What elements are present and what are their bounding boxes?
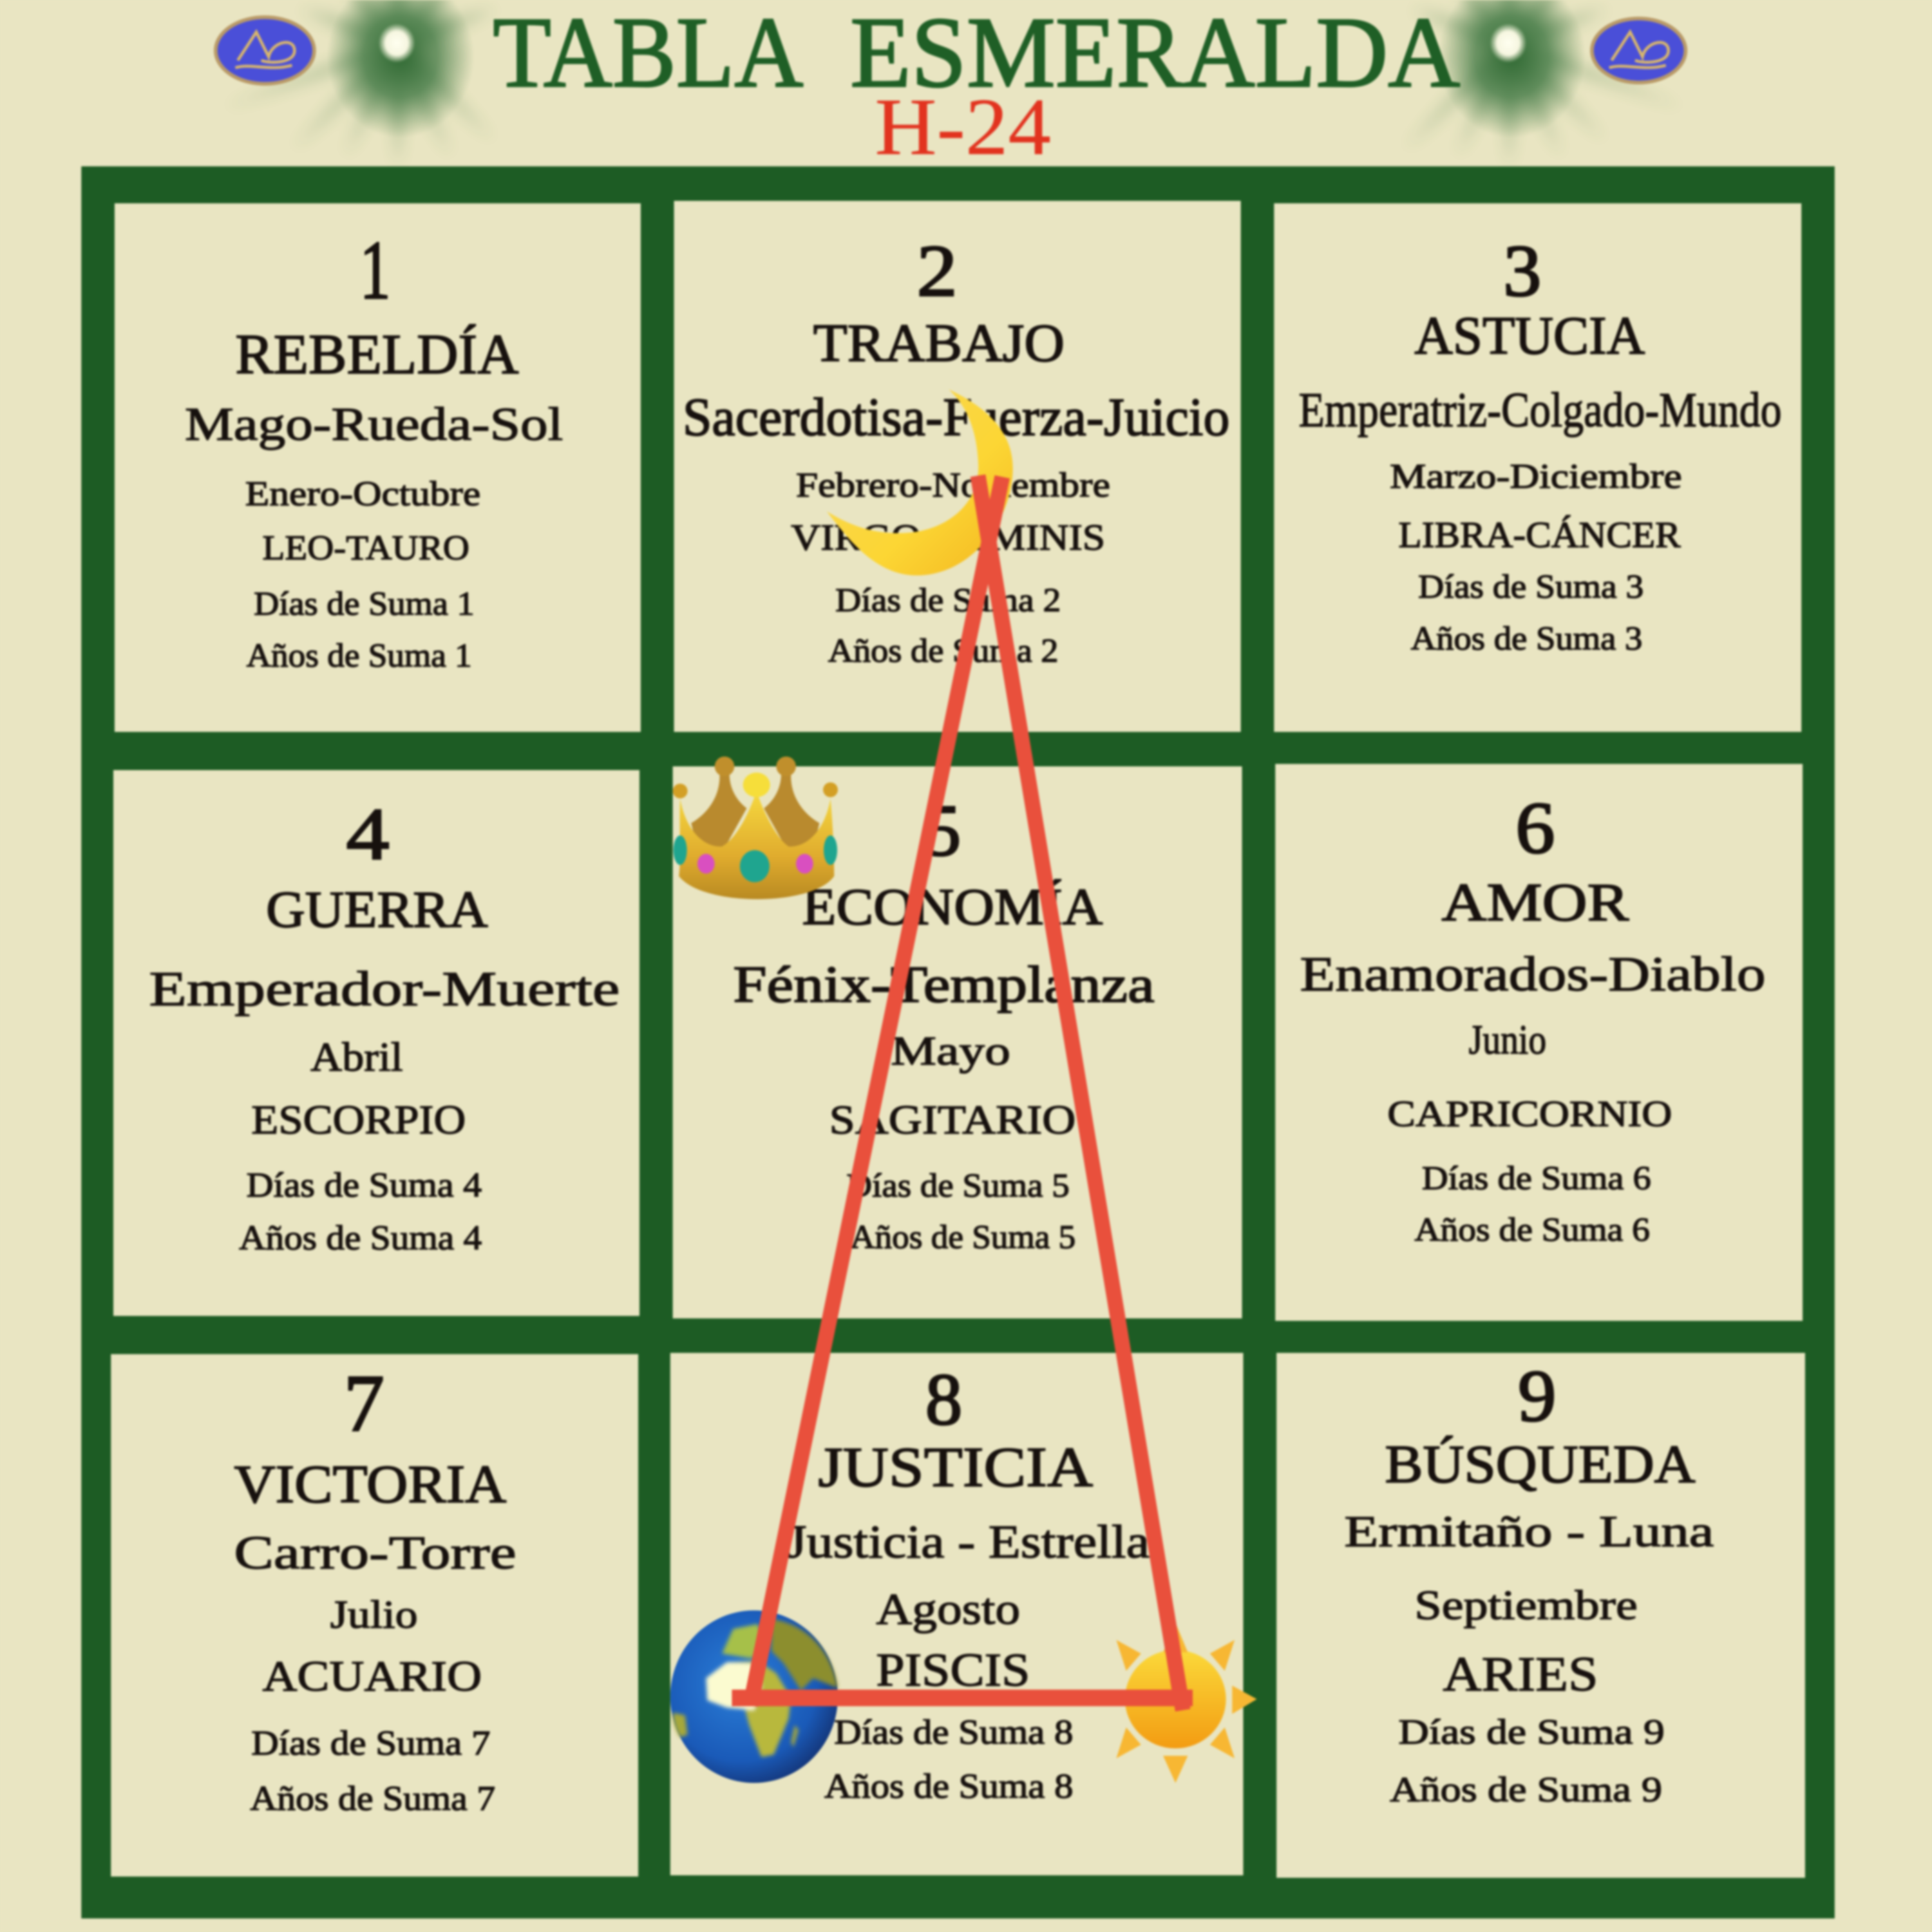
details: VIRGO-GÉMINIS (791, 517, 1105, 558)
details: ESCORPIO (251, 1097, 466, 1142)
number 2: 2 (916, 230, 958, 312)
cell background (111, 1354, 638, 1877)
number 3: 3 (1503, 230, 1541, 312)
icon: crown (673, 757, 838, 899)
heading: GUERRA (266, 881, 488, 938)
cell background (113, 770, 639, 1316)
panel: cell 9 Búsqueda (1276, 1353, 1805, 1878)
details: Años de Suma 5 (850, 1219, 1075, 1256)
details: Enero-Octubre (245, 474, 480, 513)
details: Ermitaño - Luna (1344, 1507, 1714, 1556)
icon: left logo badge (216, 17, 314, 84)
number 9: 9 (1518, 1355, 1556, 1437)
details: Años de Suma 9 (1390, 1770, 1662, 1810)
heading: ECONOMÍA (802, 878, 1103, 936)
details (185, 398, 563, 674)
details (1299, 383, 1782, 657)
number 7: 7 (344, 1358, 384, 1448)
icon: crescent moon (827, 390, 1013, 575)
details: Días de Suma 6 (1422, 1160, 1651, 1197)
details: Días de Suma 8 (834, 1712, 1073, 1751)
panel: cell 5 Economía (673, 766, 1242, 1318)
details: Días de Suma 1 (254, 586, 475, 623)
heading: TRABAJO (813, 314, 1065, 374)
heading: BÚSQUEDA (1385, 1435, 1696, 1495)
heading: REBELDÍA (235, 324, 518, 386)
details: ARIES (1443, 1647, 1598, 1701)
details (786, 1515, 1150, 1805)
details: Julio (330, 1593, 418, 1636)
panel: cell 7 Victoria (111, 1354, 638, 1877)
details (733, 956, 1155, 1256)
cell background (1275, 764, 1803, 1321)
cell background (115, 204, 641, 732)
panel: cell 4 Guerra (113, 770, 639, 1316)
details: Mayo (891, 1028, 1010, 1074)
details: Días de Suma 5 (846, 1168, 1070, 1204)
cell background (1274, 204, 1801, 732)
panel: cell 1 Rebeldía (115, 204, 641, 732)
details: PISCIS (876, 1643, 1030, 1696)
triangle: red lines connecting moon, globe and sun (732, 476, 1193, 1710)
details: Enamorados-Diablo (1300, 947, 1766, 1001)
details: Agosto (876, 1585, 1020, 1634)
details: Junio (1469, 1017, 1546, 1063)
heading: ASTUCIA (1414, 306, 1645, 366)
details (683, 387, 1229, 669)
details: Años de Suma 8 (824, 1766, 1073, 1805)
details: Años de Suma 4 (239, 1218, 482, 1257)
icon: sun (1116, 1623, 1257, 1783)
details: Años de Suma 7 (250, 1779, 495, 1818)
title (493, 0, 1460, 108)
heading: AMOR (1442, 873, 1629, 933)
details (234, 1527, 516, 1818)
details: Días de Suma 3 (1418, 569, 1643, 605)
details: Abril (310, 1035, 403, 1080)
details: LEO-TAURO (263, 529, 469, 567)
details: Días de Suma 2 (835, 582, 1061, 619)
details: Años de Suma 1 (247, 638, 472, 674)
details: Fénix-Templanza (733, 956, 1155, 1013)
details: LIBRA-CÁNCER (1399, 515, 1681, 555)
details: Días de Suma 7 (251, 1723, 490, 1762)
panel: cell 2 Trabajo (674, 201, 1241, 732)
details: Días de Suma 4 (247, 1166, 482, 1204)
details: Marzo-Diciembre (1390, 457, 1682, 496)
cell background (674, 201, 1241, 732)
icon: left starburst (222, 0, 500, 167)
number 6: 6 (1515, 787, 1555, 869)
details: Febrero-Noviembre (796, 466, 1110, 504)
number 4: 4 (346, 793, 390, 875)
details: Años de Suma 6 (1414, 1212, 1650, 1249)
details: Días de Suma 9 (1399, 1712, 1665, 1752)
number 5: 5 (924, 790, 961, 871)
details: CAPRICORNIO (1387, 1094, 1672, 1135)
icon: right starburst (1399, 0, 1685, 167)
cell background (670, 1353, 1243, 1875)
icon: right logo badge (1592, 19, 1685, 82)
details: SAGITARIO (829, 1097, 1075, 1142)
details (1300, 947, 1766, 1249)
details: Justicia - Estrella (786, 1515, 1150, 1567)
panel: cell 6 Amor (1275, 764, 1803, 1321)
details: Mago-Rueda-Sol (185, 398, 563, 450)
details: Emperatriz-Colgado-Mundo (1299, 383, 1782, 437)
details: Años de Suma 3 (1411, 620, 1642, 657)
heading: JUSTICIA (818, 1436, 1093, 1499)
subtitle: H-24: H-24 (875, 82, 1051, 172)
number 1: 1 (360, 224, 391, 317)
details: Emperador-Muerte (149, 961, 620, 1016)
icon: globe (670, 1611, 838, 1783)
details (149, 961, 620, 1257)
cell background (673, 766, 1242, 1318)
cell background (1276, 1353, 1805, 1878)
details: ACUARIO (263, 1653, 482, 1700)
details: Septiembre (1414, 1582, 1638, 1629)
number 8: 8 (925, 1359, 962, 1441)
details: Sacerdotisa-Fuerza-Juicio (683, 387, 1229, 447)
heading: VICTORIA (234, 1454, 507, 1514)
panel: cell 8 Justicia (670, 1353, 1243, 1875)
panel: cell 3 Astucia (1274, 204, 1801, 732)
details: Años de Suma 2 (828, 632, 1058, 669)
details (1344, 1507, 1714, 1810)
details: Carro-Torre (234, 1527, 516, 1579)
